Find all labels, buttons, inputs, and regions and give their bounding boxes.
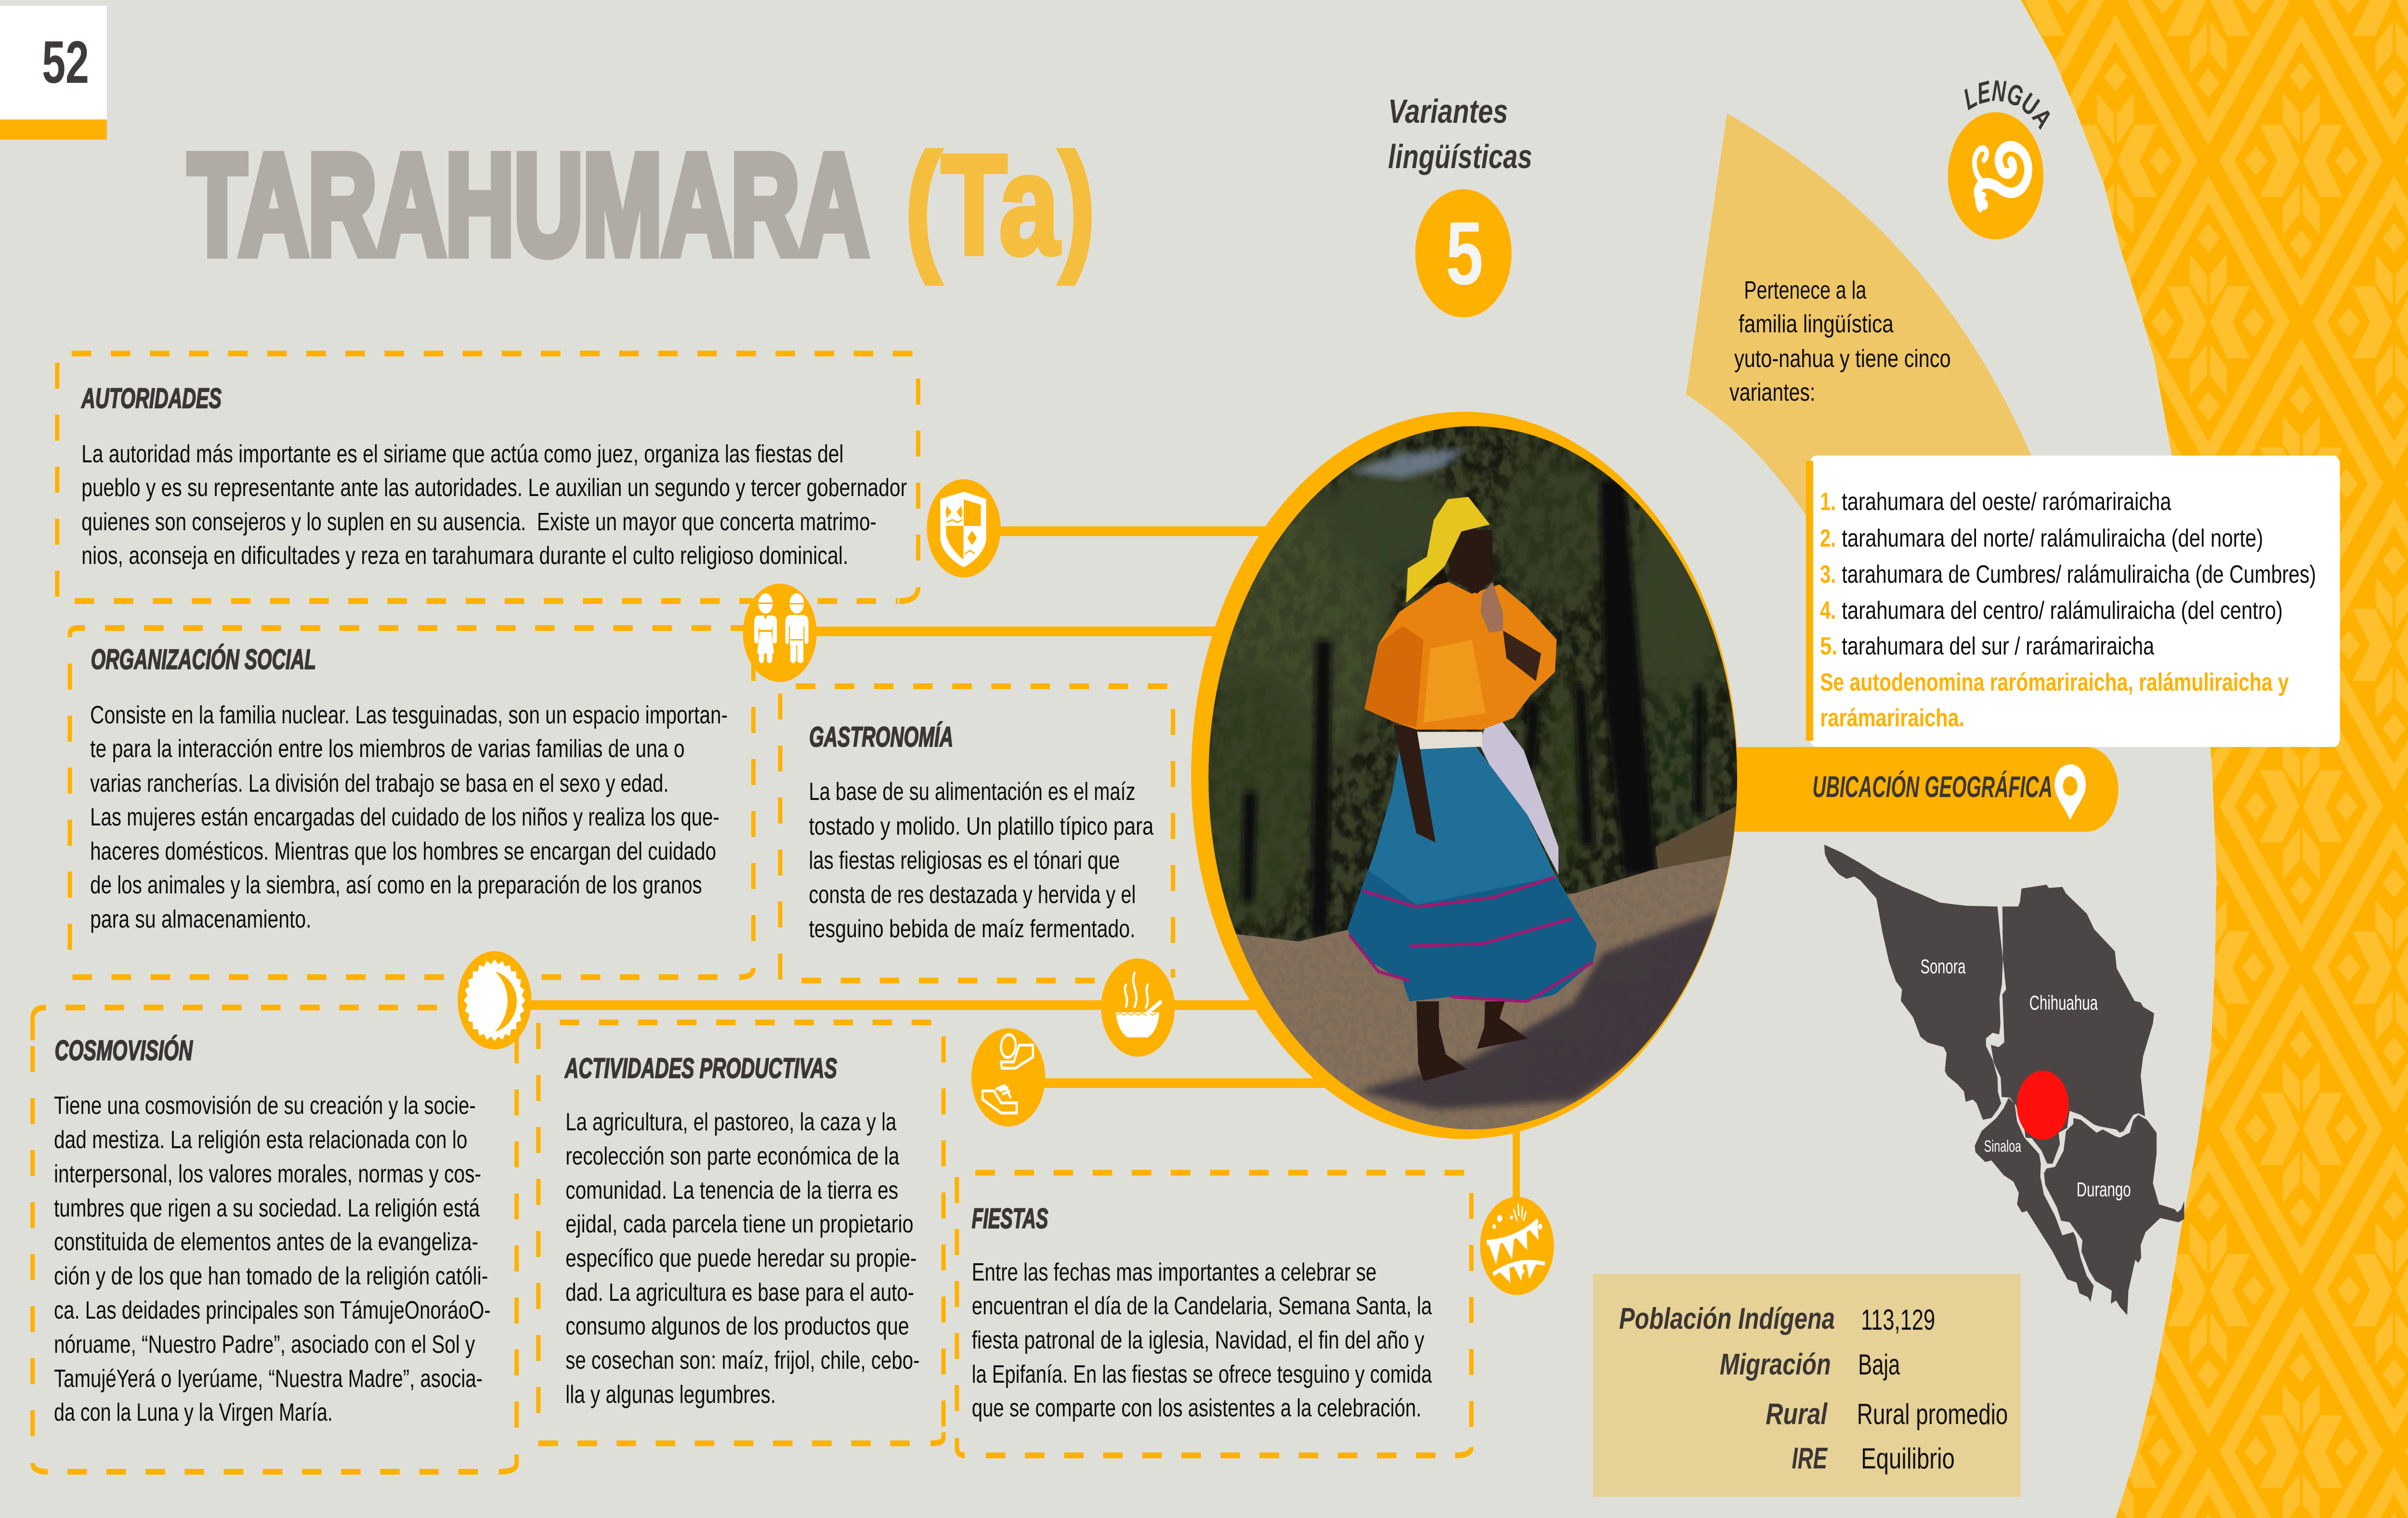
text: actividades productivas: ejidal, cada parcela tiene un propietario [565, 1210, 914, 1238]
heading: fiestas: FIESTAS [972, 1203, 1048, 1234]
panel: demographic data: IRE [1792, 1441, 1828, 1475]
text: cosmovisión: nóruame, “Nuestro Padre”, asociado con el Sol y [54, 1330, 475, 1358]
text: organización social [90, 701, 728, 933]
circular photo of Tarahumara woman [1188, 409, 1749, 1156]
panel: list of language variants: tarahumara del norte/ ralámuliraicha (del norte) [1842, 524, 2263, 552]
text: gastronomía: las fiestas religiosas es el tónari que [809, 846, 1120, 874]
text: gastronomía: tostado y molido. Un platillo típico para [809, 812, 1153, 840]
icon: shield [927, 479, 1001, 577]
panel: fiestas [957, 1173, 1471, 1455]
text: actividades productivas [565, 1108, 919, 1408]
text: autoridades [81, 440, 907, 569]
page number tab [0, 6, 107, 140]
map labels: Chihuahua [2029, 991, 2098, 1014]
panel: list of language variants: 2. [1820, 524, 1836, 552]
panel: variantes lingüísticas: 5 [1446, 203, 1483, 303]
title: (Ta) [905, 125, 1095, 285]
panel: list of language variants [1806, 456, 2340, 747]
text: autoridades: nios, aconseja en dificultades y reza en tarahumara durante el culto religioso dominical. [81, 541, 848, 569]
panel: lengua fan shape with text: yuto-nahua y tiene cinco [1734, 344, 1951, 372]
text: actividades productivas: lla y algunas legumbres. [565, 1380, 776, 1408]
map labels: Sinaloa [1984, 1138, 2021, 1155]
heading: cosmovisión: COSMOVISIÓN [55, 1035, 193, 1066]
panel: lengua fan shape with text [1686, 113, 2042, 578]
icon: bowl [1101, 958, 1175, 1057]
panel: demographic data: Rural promedio [1857, 1399, 2008, 1431]
text: actividades productivas: comunidad. La tenencia de la tierra es [565, 1176, 898, 1204]
text: cosmovisión: da con la Luna y la Virgen María. [54, 1398, 333, 1426]
title: TARAHUMARA [188, 125, 868, 284]
panel: list of language variants: 4. [1820, 596, 1836, 624]
icon: lengua swirl with curved label [1948, 80, 2050, 239]
icon: people [743, 584, 817, 682]
border: actividades productivas [538, 1022, 943, 1443]
border: cosmovisión [33, 1008, 517, 1472]
map labels: Sonora [1921, 955, 1966, 978]
panel: list of language variants: rarámariraicha. [1820, 704, 1964, 732]
panel: organización social [70, 628, 753, 977]
icon: lengua swirl with curved label: LENGUA [1964, 80, 2050, 130]
map labels: Durango [2077, 1178, 2131, 1201]
map state: Chihuahua [1991, 885, 2154, 1164]
panel: variantes lingüísticas: Variantes [1388, 93, 1508, 131]
panel: lengua fan shape with text: Pertenece a la [1744, 276, 1867, 304]
text: organización social: Consiste en la familia nuclear. Las tesguinadas, son un espacio importan- [90, 701, 728, 729]
text: cosmovisión: ca. Las deidades principales son TámujeOnoráoO- [54, 1296, 491, 1324]
border: fiestas [957, 1173, 1471, 1455]
panel: lengua fan shape with text: familia lingüística [1739, 310, 1894, 338]
panel: demographic data: Baja [1858, 1349, 1900, 1381]
panel: variantes lingüísticas: lingüísticas [1388, 138, 1532, 176]
text: actividades productivas: consumo algunos de los productos que [565, 1312, 909, 1340]
text: gastronomía [809, 777, 1153, 942]
text: cosmovisión [54, 1091, 491, 1426]
panel: cosmovisión [33, 1008, 517, 1472]
text: actividades productivas: se cosechan son: maíz, frijol, chile, cebo- [565, 1346, 919, 1374]
text: gastronomía: La base de su alimentación es el maíz [809, 777, 1136, 805]
icon: party garlands [1480, 1197, 1554, 1295]
panel: actividades productivas [538, 1022, 943, 1443]
text: actividades productivas: específico que puede heredar su propie- [565, 1244, 916, 1272]
heading: gastronomía: GASTRONOMÍA [809, 721, 953, 752]
text: organización social: varias rancherías. La división del trabajo se basa en el sexo y edad. [90, 769, 669, 797]
text: autoridades: pueblo y es su representante ante las autoridades. Le auxilian un segundo y tercer gobernador [81, 473, 907, 501]
panel: ubicación geográfica bar: UBICACIÓN GEOGRÁFICA [1812, 770, 2053, 804]
text: cosmovisión: tumbres que rigen a su sociedad. La religión está [54, 1194, 480, 1222]
panel: demographic data: 113,129 [1861, 1304, 1935, 1336]
text: organización social: para su almacenamiento. [90, 905, 312, 933]
panel: demographic data: Equilibrio [1861, 1443, 1955, 1475]
panel: demographic data: Migración [1720, 1347, 1831, 1381]
panel: list of language variants: tarahumara del centro/ ralámuliraicha (del centro) [1842, 596, 2283, 624]
icon: hands [971, 1028, 1045, 1126]
text: organización social: de los animales y la siembra, así como en la preparación de los granos [90, 871, 702, 899]
panel: list of language variants: tarahumara de Cumbres/ ralámuliraicha (de Cumbres) [1842, 560, 2316, 588]
text: cosmovisión: constituida de elementos antes de la evangeliza- [54, 1228, 478, 1256]
text: organización social: Las mujeres están encargadas del cuidado de los niños y realiza los que- [90, 803, 720, 831]
text: autoridades: La autoridad más importante es el siriame que actúa como juez, organiza las fiestas del [81, 440, 844, 468]
border: organización social [70, 628, 753, 977]
connector lines from icons to photo [522, 531, 1516, 1204]
heading: organización social: ORGANIZACIÓN SOCIAL [91, 644, 316, 675]
border: autoridades [57, 353, 918, 601]
text: actividades productivas: La agricultura, el pastoreo, la caza y la [565, 1108, 897, 1136]
panel: demographic data: Rural [1766, 1397, 1828, 1431]
text: fiestas: Entre las fechas mas importantes a celebrar se [972, 1258, 1376, 1286]
text: gastronomía: consta de res destazada y hervida y el [809, 880, 1136, 908]
map state: Durango [2044, 1115, 2184, 1315]
map labels [1921, 955, 2131, 1201]
text: organización social: haceres domésticos. Mientras que los hombres se encargan del cuidado [90, 837, 716, 865]
text: cosmovisión: TamujéYerá o Iyerúame, “Nuestra Madre”, asocia- [54, 1364, 483, 1392]
panel: list of language variants: 1. [1820, 487, 1836, 515]
woman [1416, 1001, 1528, 1081]
text: fiestas: fiesta patronal de la iglesia, Navidad, el fin del año y [972, 1326, 1424, 1354]
panel: autoridades [57, 353, 918, 601]
text: gastronomía: tesguino bebida de maíz fermentado. [809, 915, 1136, 942]
text: fiestas [972, 1258, 1432, 1422]
map state: Sinaloa [1975, 1098, 2094, 1302]
panel: lengua fan shape with text: variantes: [1729, 378, 1815, 406]
text: cosmovisión: dad mestiza. La religión esta relacionada con lo [54, 1125, 468, 1153]
heading: actividades productivas: ACTIVIDADES PRODUCTIVAS [564, 1053, 837, 1084]
panel: demographic data: Población Indígena [1619, 1301, 1835, 1335]
page number tab: 52 [42, 29, 89, 96]
text: fiestas: que se comparte con los asistentes a la celebración. [972, 1394, 1421, 1422]
panel: list of language variants: tarahumara del sur / rarámariraicha [1842, 632, 2154, 660]
text: organización social: te para la interacción entre los miembros de varias familias de una o [90, 734, 685, 762]
panel: list of language variants: 5. [1820, 632, 1837, 660]
text: cosmovisión: interpersonal, los valores morales, normas y cos- [54, 1160, 481, 1188]
icon: sun and moon [458, 951, 532, 1049]
panel: list of language variants: 3. [1820, 560, 1836, 588]
panel: list of language variants: Se autodenomina rarómariraicha, ralámuliraicha y [1820, 668, 2289, 696]
panel: variantes lingüísticas [1388, 93, 1532, 317]
panel: list of language variants: tarahumara del oeste/ rarómariraicha [1842, 487, 2172, 515]
text: cosmovisión: ción y de los que han tomado de la religión católi- [54, 1262, 488, 1290]
panel: gastronomía [780, 686, 1173, 982]
text: autoridades: quienes son consejeros y lo suplen en su ausencia. Existe un mayor que concerta matrimo- [81, 508, 877, 536]
border: gastronomía [780, 686, 1173, 982]
panel: demographic data [1593, 1274, 2021, 1497]
map marker: red location dot [2017, 1071, 2068, 1139]
text: fiestas: encuentran el día de la Candelaria, Semana Santa, la [972, 1292, 1432, 1320]
map state: Sonora [1824, 845, 2003, 1120]
heading: autoridades: AUTORIDADES [81, 383, 222, 414]
text: actividades productivas: recolección son parte económica de la [565, 1142, 900, 1170]
text: fiestas: la Epifanía. En las fiestas se ofrece tesguino y comida [972, 1360, 1432, 1388]
panel: ubicación geográfica bar [1684, 747, 2119, 832]
text: actividades productivas: dad. La agricultura es base para el auto- [565, 1278, 914, 1306]
map of northern Mexico [1824, 845, 2184, 1315]
woven yellow pattern background [1955, 0, 2408, 1518]
text: cosmovisión: Tiene una cosmovisión de su creación y la socie- [54, 1091, 476, 1119]
